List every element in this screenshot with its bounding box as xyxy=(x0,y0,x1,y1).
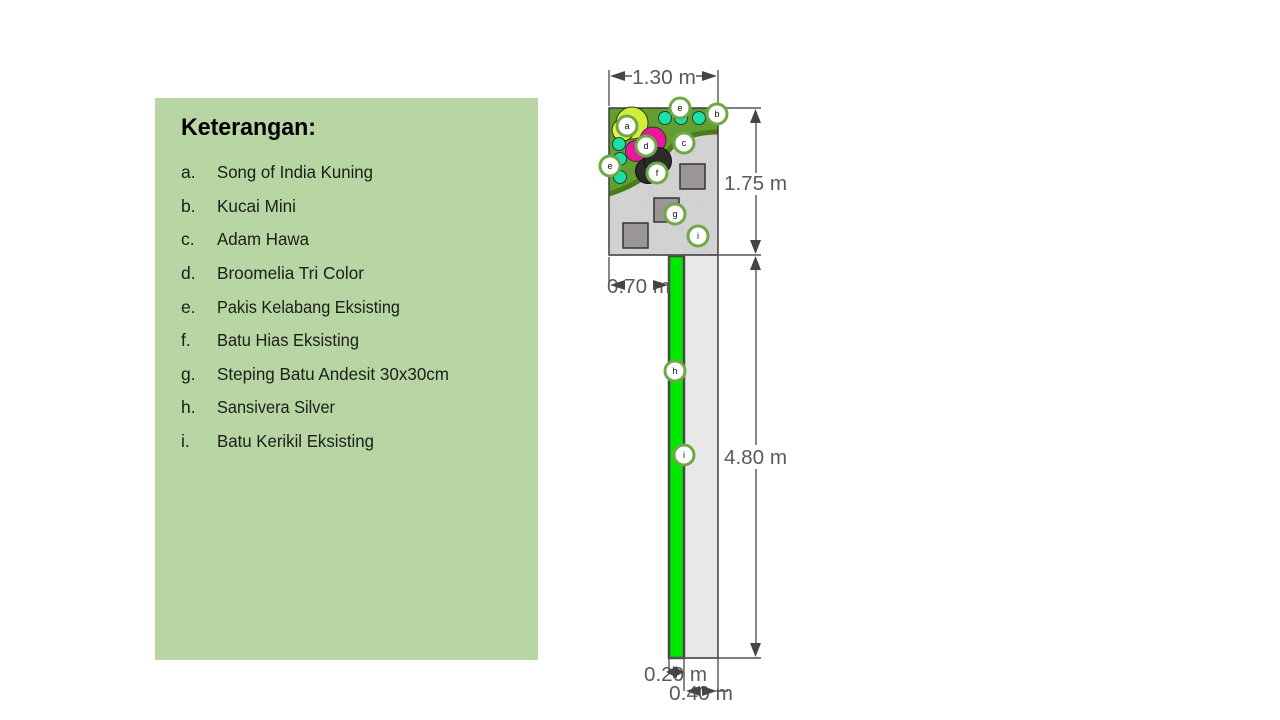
marker d xyxy=(636,136,656,156)
stones: batu hias xyxy=(636,148,672,184)
legend list: Song of India Kuning xyxy=(217,162,373,182)
legend list: d. xyxy=(181,263,196,283)
marker a: a xyxy=(624,121,630,131)
dimension labels: 4.80 m xyxy=(724,446,787,469)
bed edge band xyxy=(609,132,718,194)
legend list: g. xyxy=(181,364,196,384)
legend list: Sansivera Silver xyxy=(217,397,335,417)
marker labels xyxy=(600,98,727,465)
legend list: Adam Hawa xyxy=(217,229,309,249)
legend list: Steping Batu Andesit 30x30cm xyxy=(217,364,449,384)
marker b: b xyxy=(714,109,720,119)
marker i top xyxy=(688,226,708,246)
legend list: Kucai Mini xyxy=(217,196,296,216)
plot outline xyxy=(609,108,718,255)
legend list: Broomelia Tri Color xyxy=(217,263,364,283)
marker h: h xyxy=(672,366,678,376)
marker e top xyxy=(670,98,690,118)
legend list: Pakis Kelabang Eksisting xyxy=(217,297,400,317)
marker i top: i xyxy=(697,231,699,241)
marker c xyxy=(674,133,694,153)
marker d: d xyxy=(643,141,649,151)
stepping stones xyxy=(623,164,705,248)
narrow strip: sansivera xyxy=(669,256,684,658)
plant: bromelia xyxy=(626,127,666,162)
dimension labels: 1.30 m xyxy=(632,66,696,89)
gravel area xyxy=(609,108,718,255)
plant: song of india xyxy=(612,107,648,141)
dimension arrows xyxy=(610,71,761,696)
marker e left: e xyxy=(607,161,613,171)
marker b xyxy=(707,104,727,124)
marker a xyxy=(617,116,637,136)
marker g: g xyxy=(672,209,678,219)
heading: Keterangan: Keterangan: xyxy=(181,114,316,141)
dimension labels: 0.70 m xyxy=(607,275,670,298)
legend list: i. xyxy=(181,431,190,451)
marker i bottom xyxy=(674,445,694,465)
site plan drawing xyxy=(609,107,718,658)
legend list: Batu Kerikil Eksisting xyxy=(217,431,374,451)
dimension labels: 0.40 m xyxy=(669,682,733,705)
marker c: c xyxy=(682,138,687,148)
planting bed xyxy=(609,108,718,192)
marker g xyxy=(665,204,685,224)
plants: pakis kelabang and kucai xyxy=(612,112,706,184)
narrow strip: gravel xyxy=(684,255,718,658)
dimension labels xyxy=(607,66,787,705)
marker f xyxy=(647,163,667,183)
legend list: h. xyxy=(181,397,196,417)
marker e top: e xyxy=(677,103,683,113)
legend list: c. xyxy=(181,229,195,249)
panel: legend xyxy=(155,98,538,660)
legend list: e. xyxy=(181,297,196,317)
legend list xyxy=(181,162,449,451)
dimension labels: 0.20 m xyxy=(644,663,707,686)
legend list: a. xyxy=(181,162,196,182)
legend list: Batu Hias Eksisting xyxy=(217,330,359,350)
legend list: b. xyxy=(181,196,196,216)
marker e left xyxy=(600,156,620,176)
dimension lines and labels xyxy=(607,66,787,705)
marker f: f xyxy=(656,168,659,178)
marker i bottom: i xyxy=(683,450,685,460)
dimension labels: 1.75 m xyxy=(724,172,787,195)
legend list: f. xyxy=(181,330,191,350)
marker h xyxy=(665,361,685,381)
